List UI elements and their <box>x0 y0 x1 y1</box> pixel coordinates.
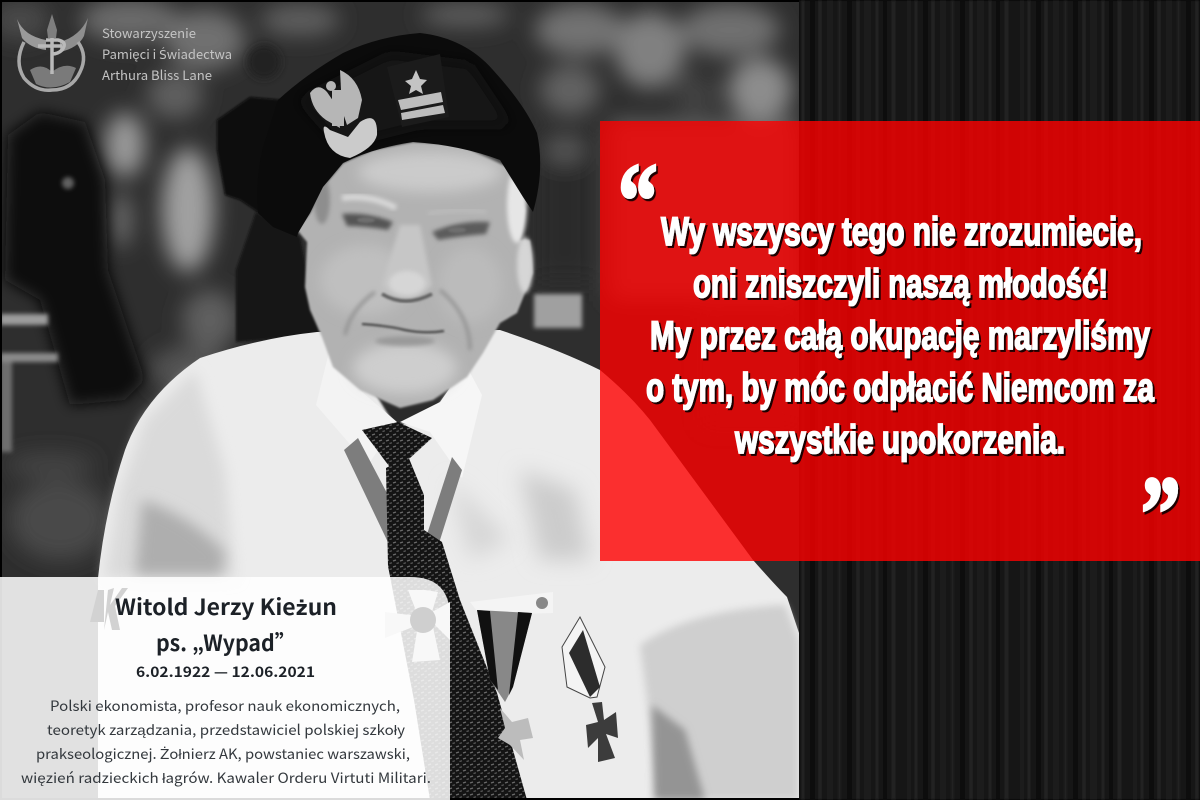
white box in background <box>534 294 582 328</box>
order cross seen through panel <box>385 590 450 662</box>
quote text <box>646 210 1155 462</box>
red quote panel <box>600 121 1200 573</box>
blurred crowd background <box>0 0 800 560</box>
beret eagle badge <box>310 70 377 158</box>
biography text <box>21 696 431 788</box>
left medal ribbon <box>477 610 532 702</box>
face <box>297 142 533 408</box>
nose <box>392 224 432 298</box>
right medal ribbon <box>562 617 605 698</box>
association name <box>102 23 232 84</box>
dark cross <box>586 702 618 762</box>
medal ribbon <box>344 438 462 541</box>
quote text: wszystkie upokorzenia. <box>734 418 1065 462</box>
background figure <box>217 45 285 215</box>
shirt shading <box>105 370 235 578</box>
association name: Pamięci i Świadectwa <box>102 44 232 63</box>
icon: closing quotation mark: ” <box>1141 456 1181 573</box>
silver cross <box>498 708 533 760</box>
blurred left figure and benches <box>5 112 145 405</box>
faint armband letters shape <box>90 588 128 630</box>
eyes and brows <box>342 214 393 230</box>
collar <box>382 410 397 424</box>
icon: opening quotation mark: “ <box>618 143 658 260</box>
photo: veteran in beret <box>0 0 800 800</box>
neck shadow <box>372 388 450 426</box>
name: Witold Jerzy Kie żun <box>115 590 337 622</box>
biography text: więzień radzieckich łagrów. Kawaler Orderu Virtuti Militari. <box>21 768 431 788</box>
card in pocket <box>470 592 553 615</box>
biography panel <box>0 577 450 800</box>
dates: 6.02.1922 — 12.06.2021 <box>136 662 315 682</box>
mouth <box>362 324 444 332</box>
shirt <box>98 330 799 800</box>
logo and association name <box>17 14 232 90</box>
tie <box>362 422 527 800</box>
biography text: Polski ekonomista, profesor nauk ekonomicznych, <box>50 696 400 716</box>
medals <box>470 592 618 762</box>
biography text: prakseologicznej. Żołnierz AK, powstaniec warszawski, <box>36 744 410 764</box>
association name: Stowarzyszenie <box>102 23 196 42</box>
pseudonym: ps. „Wypad” <box>156 626 296 658</box>
chair back <box>236 212 320 342</box>
biography text: teoretyk zarządzania, przedstawiciel polskiej szkoły <box>47 720 406 740</box>
beret <box>257 33 540 237</box>
dark wood background <box>799 0 1200 800</box>
association name: Arthura Bliss Lane <box>102 65 212 84</box>
beret rank patch <box>398 54 445 127</box>
icon: eagle and anchor emblem <box>17 14 88 90</box>
